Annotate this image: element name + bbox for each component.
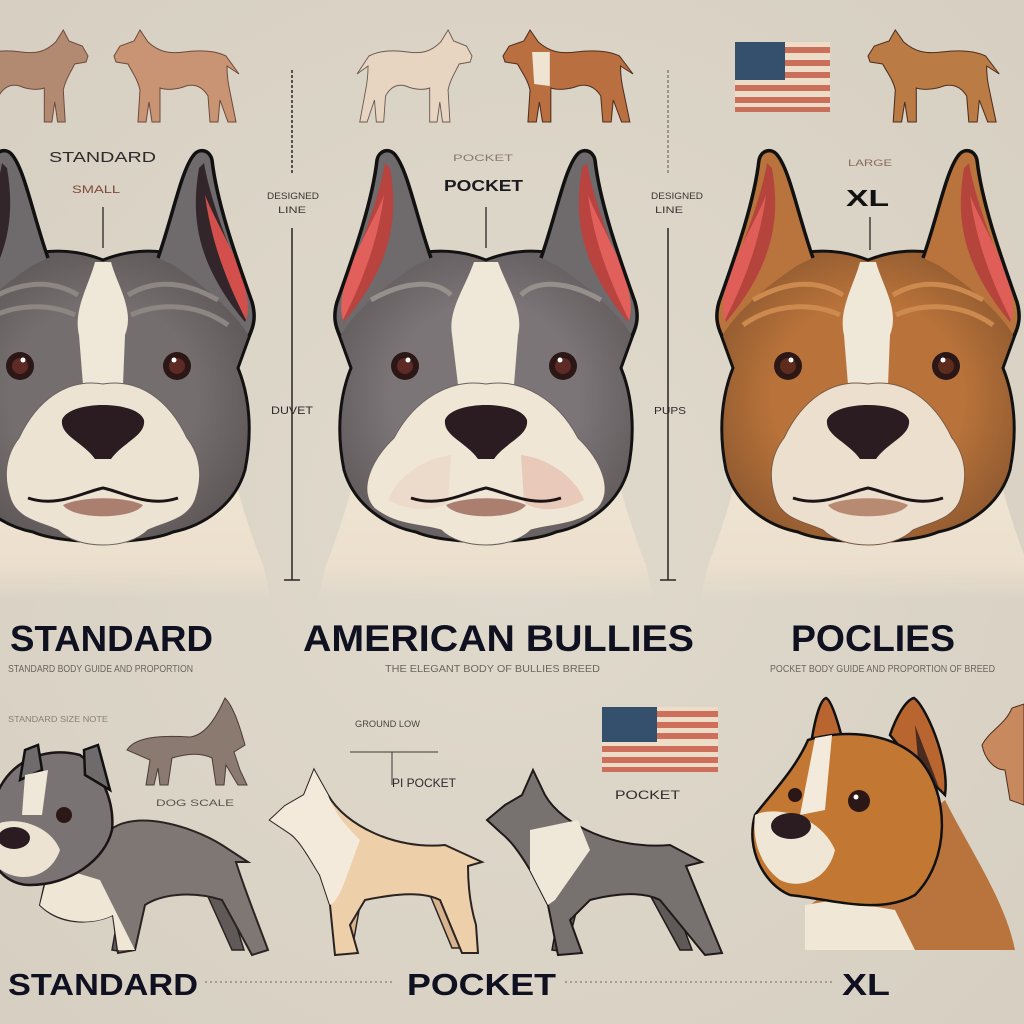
- center ticks under labels: [103, 207, 870, 250]
- muzzle: [6, 383, 200, 545]
- ears: [335, 151, 637, 336]
- note: bottom center: GROUND LOW: [355, 719, 421, 729]
- flag caption: POCKET: [615, 788, 681, 802]
- top dog: tan, facing right: [0, 30, 88, 122]
- note: body small: DOG SCALE: [156, 798, 234, 808]
- label: small note left: SMALL: [72, 184, 120, 196]
- head: standard grey: [0, 151, 271, 600]
- eyes: [391, 352, 577, 380]
- divider line with pocket note: [350, 752, 438, 785]
- small grey dog silhouette: [127, 698, 247, 785]
- eyes: [774, 352, 960, 380]
- face: [720, 251, 1016, 542]
- ears: [717, 151, 1019, 336]
- dog: pocket cream body: [270, 770, 482, 955]
- bottom flag: [602, 707, 718, 772]
- label: small note center: POCKET: [453, 153, 514, 163]
- head: orange three-quarter: [752, 698, 1015, 950]
- top dog: cream, facing right: [357, 30, 472, 122]
- note: bottom left: STANDARD SIZE NOTE: [8, 715, 108, 724]
- subheading: left: STANDARD BODY GUIDE AND PROPORTION: [8, 664, 193, 675]
- head: pocket grey: [318, 151, 654, 600]
- face: [0, 251, 251, 542]
- small dog at right edge: [982, 704, 1024, 805]
- top dog: orange, facing left: [868, 30, 999, 122]
- face: [338, 251, 634, 542]
- heading: american bullies: AMERICAN BULLIES: [303, 618, 694, 659]
- label: XL bottom: XL: [842, 967, 890, 1002]
- label: standard bottom: STANDARD: [8, 967, 198, 1002]
- label: side note left lower: LINE: [278, 205, 306, 215]
- label: standard: STANDARD: [49, 150, 156, 166]
- top dog: peach, facing left: [114, 30, 239, 122]
- label: side note right upper: DESIGNED: [651, 191, 704, 201]
- top flag: [735, 42, 830, 112]
- subheading: center: THE ELEGANT BODY OF BULLIES BREED: [385, 664, 600, 675]
- dog: standard full body: [0, 745, 268, 955]
- subheading: right: POCKET BODY GUIDE AND PROPORTION OF BREED: [770, 664, 995, 675]
- label: side note left upper: DESIGNED: [267, 191, 320, 201]
- label: duvet left: DUVET: [271, 405, 313, 417]
- ears: [0, 151, 254, 336]
- label: XL: XL: [846, 185, 889, 211]
- top dog: orange and white, facing left: [503, 30, 633, 122]
- eyes: [6, 352, 191, 380]
- label: pocket: POCKET: [444, 178, 523, 195]
- measure line: left: [284, 228, 300, 580]
- measure line: right: [660, 228, 676, 580]
- label: side note right lower: LINE: [655, 205, 683, 215]
- label: pocket bottom: POCKET: [407, 967, 556, 1002]
- muzzle: [771, 383, 965, 545]
- heading: standard: STANDARD: [10, 618, 213, 659]
- muzzle: [367, 383, 605, 545]
- head: XL orange: [700, 151, 1024, 600]
- nose: [827, 405, 909, 459]
- dog: pocket grey body: [487, 770, 722, 955]
- heading: poclies: POCLIES: [791, 618, 955, 659]
- note: pocket small: PI POCKET: [392, 776, 457, 790]
- label: duvet right: PUPS: [654, 406, 686, 417]
- label: small note right: LARGE: [848, 158, 892, 168]
- nose: [445, 405, 527, 459]
- nose: [62, 405, 144, 459]
